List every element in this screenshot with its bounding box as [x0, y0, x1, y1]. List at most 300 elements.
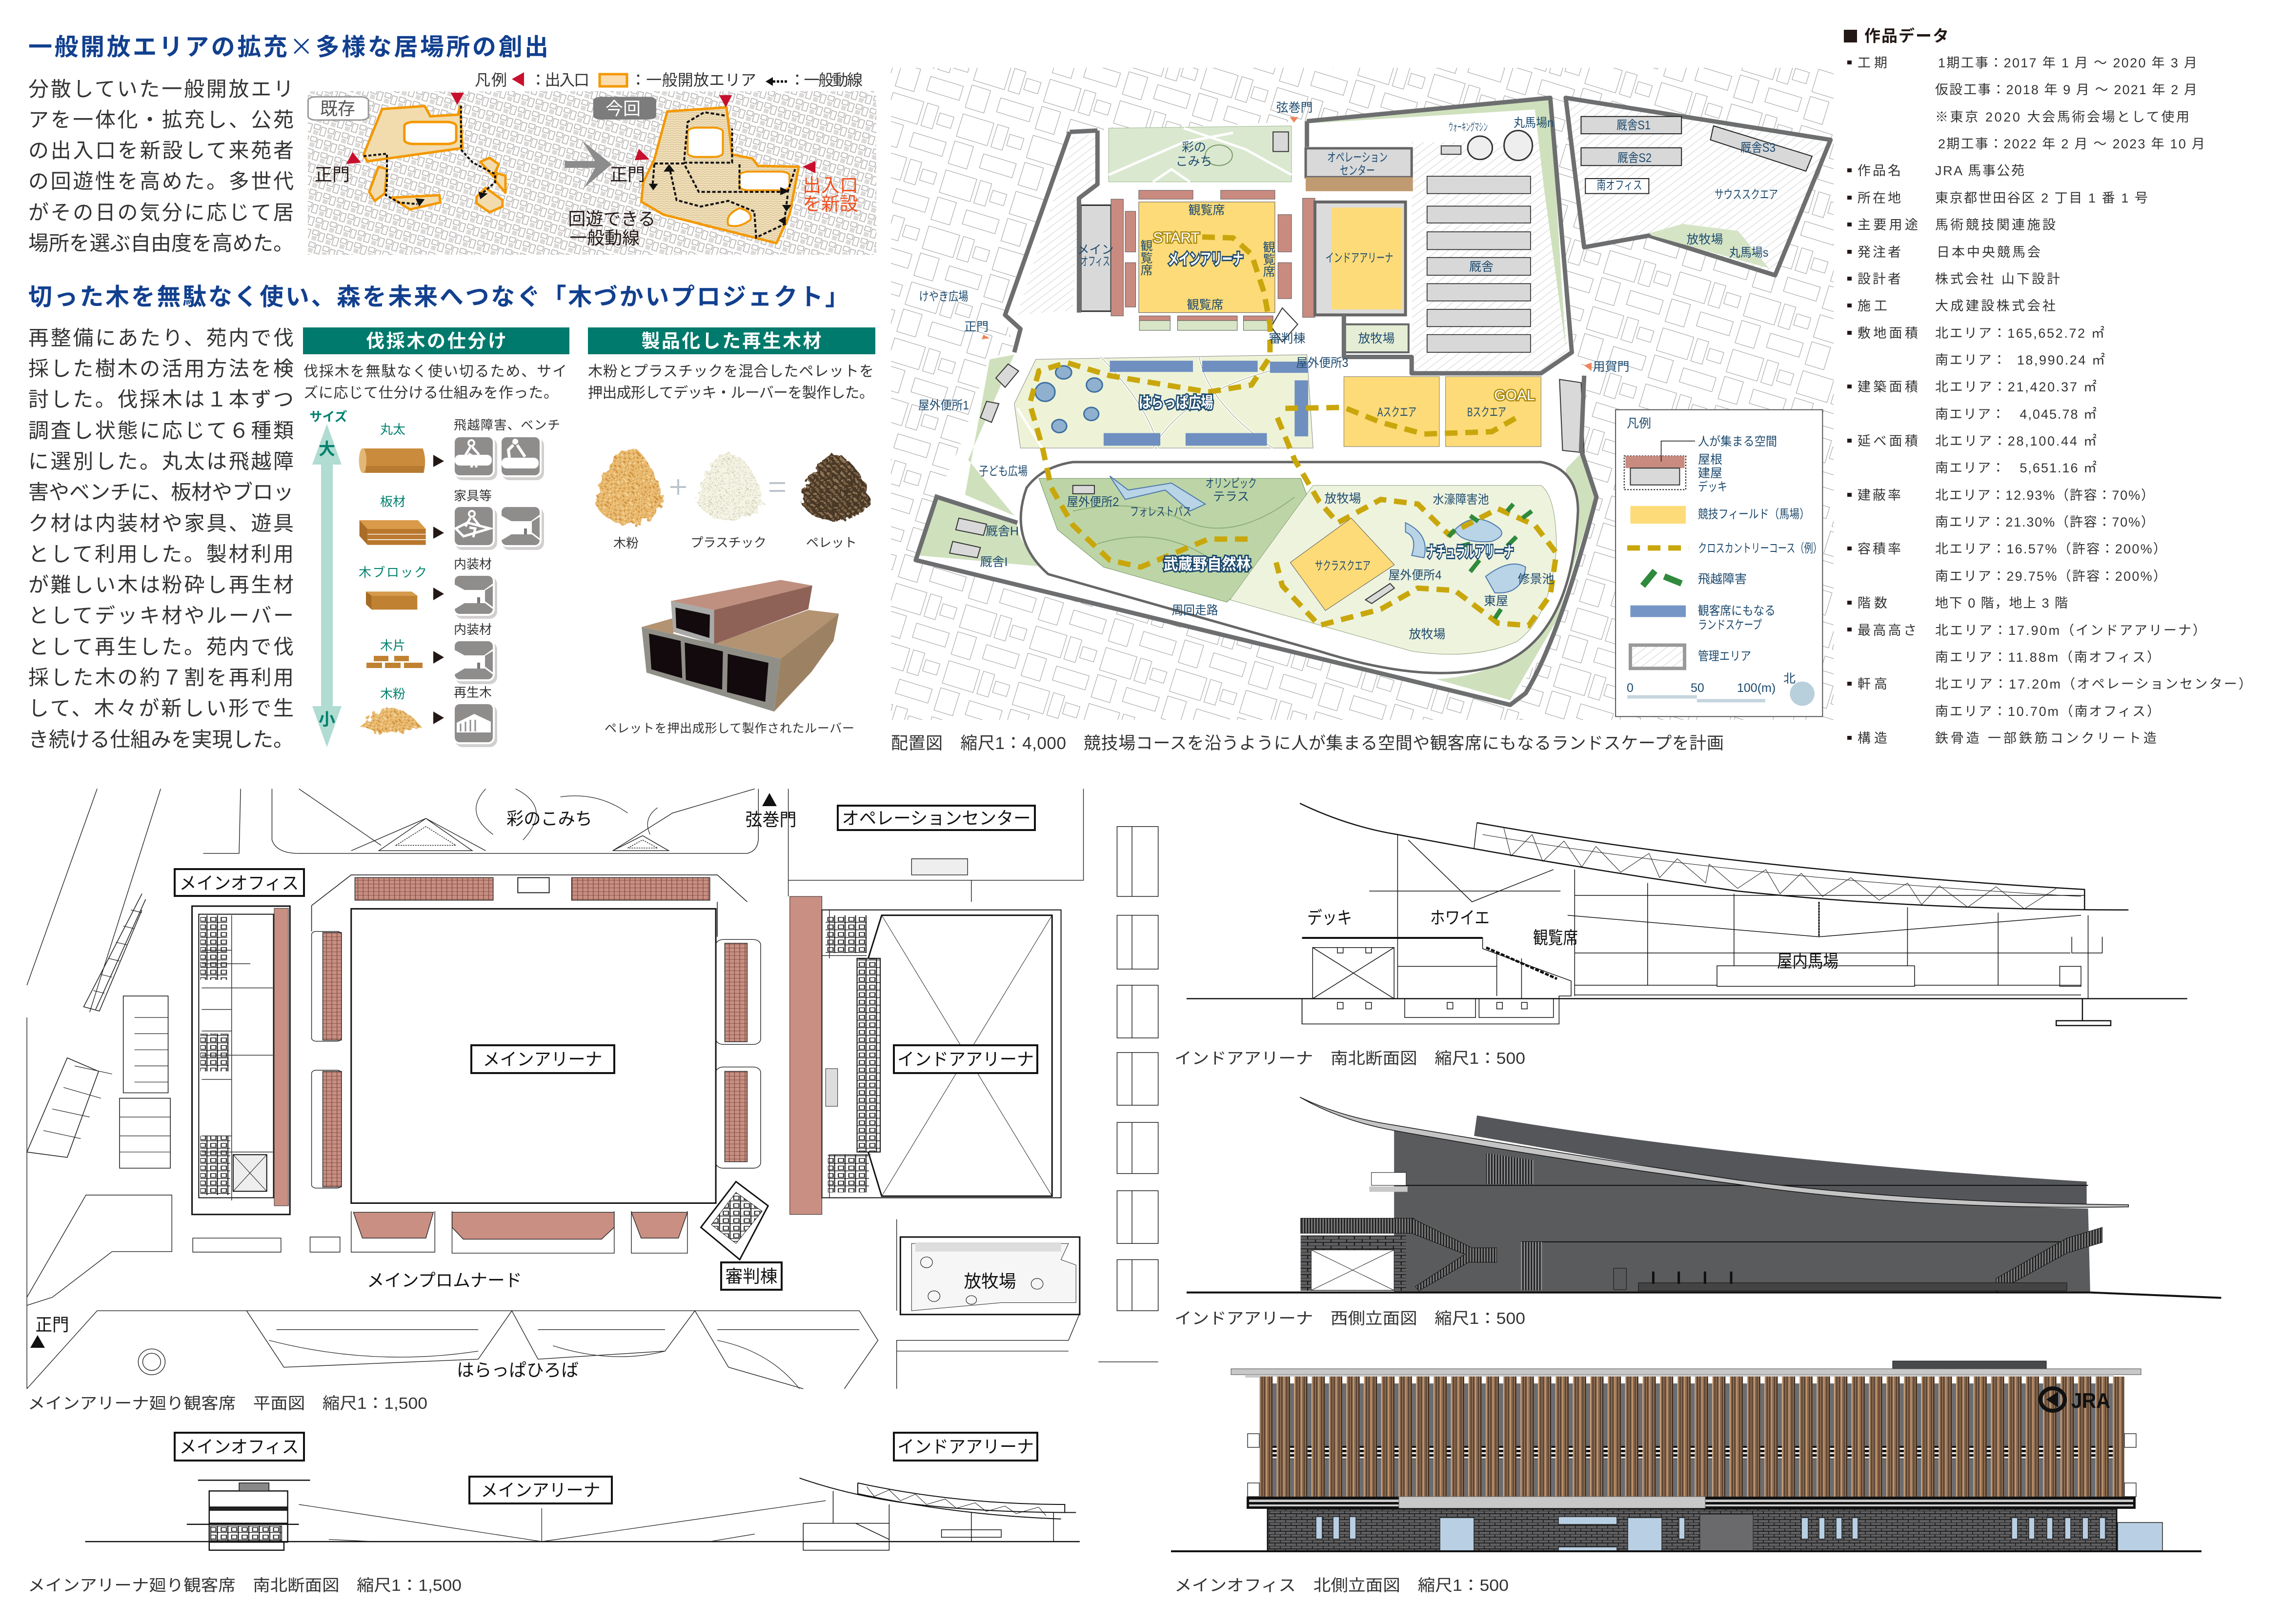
data labels: 延べ面積	[1858, 434, 1918, 448]
data labels: 建蔽率	[1858, 488, 1901, 503]
wood type labels: 丸太	[380, 422, 405, 437]
site plan labels: 武蔵野自然林	[1163, 555, 1251, 573]
plan labels with frames: オペレーションセンター	[842, 808, 1030, 828]
office section	[187, 1480, 310, 1550]
parking stripes	[27, 894, 170, 1168]
data values: 北エリア：16.57%（許容：200%）	[1935, 542, 2166, 556]
legend labels: 建屋	[1698, 467, 1722, 480]
site plan labels: テラス	[1213, 490, 1249, 504]
section heading: open area expansion: 一般開放エリアの拡充×多様な居場所の創出	[28, 28, 548, 62]
site plan labels: 屋外便所1	[918, 399, 969, 412]
water features	[1110, 476, 1526, 593]
existing open area	[364, 106, 505, 212]
site plan labels: Aスクエア	[1377, 406, 1416, 419]
data values: 南エリア： 18,990.24 ㎡	[1935, 353, 2105, 367]
roof edge	[1300, 1097, 2128, 1207]
site plan labels: 観覧席	[1139, 239, 1152, 276]
data labels: 建築面積	[1858, 380, 1918, 394]
operation center	[1306, 148, 1412, 177]
site plan labels: ナチュラルアリーナ	[1427, 543, 1514, 561]
data labels: 設計者	[1858, 272, 1901, 286]
wood type labels: 木ブロック	[359, 565, 427, 580]
indoor section labels	[1307, 908, 1838, 971]
data values: 南エリア：10.70m（南オフィス）	[1935, 704, 2160, 719]
use labels	[454, 418, 560, 700]
data values: 株式会社 山下設計	[1935, 272, 2060, 286]
site plan labels: けやき広場	[919, 290, 968, 304]
data values: 日本中央競馬会	[1937, 245, 2040, 260]
text block: wood project description: として利用した。製材利用	[28, 543, 294, 566]
site plan labels: 弦巻門	[1276, 101, 1313, 115]
map labels: 今回	[606, 99, 641, 119]
panel: felled wood sorting	[303, 327, 569, 747]
site plan labels: 屋外便所4	[1389, 568, 1442, 582]
wood type labels: 板材	[380, 494, 405, 509]
management hatch	[1017, 133, 1569, 373]
data values: 北エリア：21,420.37 ㎡	[1935, 380, 2097, 394]
site plan caption: 配置図 縮尺1：4,000 競技場コースを沿うように人が集まる空間や観客席にもなるランドスケープを計画	[891, 734, 1724, 753]
header: sorting	[303, 327, 569, 354]
site plan labels: 屋外便所2	[1067, 495, 1119, 509]
text block: open area description: がその日の気分に応じて居	[28, 201, 294, 224]
management boundary	[916, 98, 1596, 705]
site plan labels: オフィス	[1081, 255, 1110, 268]
main arena ring	[351, 909, 716, 1203]
plan labels plain: 放牧場	[964, 1271, 1016, 1291]
stables	[1427, 176, 1531, 352]
Sakura square	[1290, 518, 1394, 610]
site plan labels: 周回走路	[1172, 604, 1218, 617]
data labels: 構造	[1858, 731, 1887, 746]
JRA logo	[2040, 1388, 2110, 1413]
site plan labels: オペレーション	[1327, 151, 1388, 164]
data labels: 敷地面積	[1858, 326, 1918, 341]
main arena seating	[1125, 190, 1292, 321]
site plan labels: 厩舎S1	[1616, 119, 1651, 132]
main arena seating plan	[323, 877, 747, 1187]
plan labels with frames: メインオフィス	[180, 873, 299, 893]
deck rail and stairs	[1301, 1218, 1414, 1233]
site plan labels: 厩舎S3	[1740, 141, 1776, 155]
roof slab	[1231, 1369, 2141, 1375]
map backgrounds: surrounding city	[308, 91, 876, 255]
text: sorting description: 伐採木を無駄なく使い切るため、サイ	[303, 364, 567, 380]
wood chips	[366, 656, 423, 668]
site plan labels: GOAL	[1494, 387, 1535, 404]
section labels: インドアアリーナ	[897, 1437, 1034, 1457]
north and south site ground	[916, 98, 1596, 705]
indoor arena	[1303, 198, 1315, 317]
data values: 北エリア：17.90m（インドアアリーナ）	[1935, 623, 2206, 638]
material labels: 木粉	[613, 536, 639, 550]
green perimeter	[916, 99, 1595, 700]
roof truss	[1300, 803, 2128, 910]
site plan labels: 丸馬場n	[1514, 116, 1554, 130]
text block: wood project description: 調査し状態に応じて６種類	[28, 419, 294, 442]
site plan labels: 厩舎S2	[1617, 151, 1652, 165]
site plan labels: 放牧場	[1358, 332, 1395, 345]
text block: wood project description: 害やベンチに、板材やブロッ	[28, 481, 294, 504]
use icon: recycled wood	[453, 702, 497, 747]
data values: JRA 馬事公苑	[1935, 163, 2024, 178]
site plan labels: はらっぱ広場	[1139, 394, 1213, 411]
site plan labels: フォレストパス	[1130, 505, 1191, 519]
site plan labels: メインアリーナ	[1168, 250, 1243, 268]
plastic pile	[697, 454, 763, 520]
data values: 北エリア：17.20m（オペレーションセンター）	[1935, 677, 2252, 691]
seating outlines	[193, 932, 761, 1253]
legend labels: デッキ	[1698, 480, 1727, 494]
indoor section labels: 観覧席	[1533, 928, 1578, 948]
text block: open area description: の出入口を新設して来苑者	[28, 139, 294, 162]
plan labels plain: 彩のこみち	[506, 809, 592, 829]
legend: access maps: ：一般動線	[789, 71, 863, 89]
text block: wood project description: 討した。伐採木は１本ずつ	[28, 388, 294, 411]
main office	[1081, 205, 1111, 311]
plan labels plain: はらっぱひろば	[457, 1360, 579, 1380]
site plan labels: サウススクエア	[1715, 188, 1778, 202]
north circles	[1468, 130, 1533, 161]
plan labels plain: メインプロムナード	[367, 1270, 522, 1290]
site plan labels: 放牧場	[1324, 492, 1361, 506]
data values: 鉄骨造 一部鉄筋コンクリート造	[1935, 731, 2157, 746]
arrows to uses	[433, 455, 444, 724]
data labels: 作品名	[1858, 163, 1901, 178]
legend labels	[1627, 417, 1822, 695]
data values: 南エリア： 4,045.78 ㎡	[1935, 407, 2097, 422]
badges	[308, 97, 368, 120]
wood type labels	[359, 422, 427, 701]
use icon: interior 1	[500, 505, 544, 550]
size arrow: 小	[319, 710, 335, 729]
columns and frame	[1369, 834, 2088, 999]
indoor arena plan	[790, 896, 1061, 1215]
data labels: 発注者	[1858, 245, 1901, 260]
text block: wood project description: としてデッキ材やルーバー	[28, 604, 294, 627]
data values: 東京都世田谷区 2 丁目 1 番 1 号	[1935, 191, 2148, 205]
use labels: 内装材	[454, 622, 492, 637]
section labels	[175, 1433, 1037, 1503]
header: sorting: 伐採木の仕分け	[366, 331, 506, 352]
text block: open area description	[28, 78, 294, 255]
cross-country course	[1030, 237, 1556, 626]
new circulation	[652, 112, 795, 238]
legend labels: 競技フィールド（馬場）	[1698, 508, 1810, 521]
legend: access maps: ：一般開放エリア	[630, 71, 756, 89]
site plan labels: 屋外便所3	[1296, 356, 1349, 370]
plan labels with frames: 審判棟	[725, 1266, 778, 1286]
indoor section labels: ホワイエ	[1430, 908, 1490, 928]
legend labels: 凡例	[1627, 417, 1651, 430]
louver caption: ペレットを押出成形して製作されたルーバー	[605, 722, 854, 735]
legend panel	[1616, 410, 1822, 716]
plaza stands	[1104, 361, 1308, 446]
plan labels with frames	[175, 806, 1037, 1290]
cornice	[1247, 1497, 2136, 1509]
data heading: 作品データ	[1864, 27, 1949, 45]
legend: access maps: ：出入口	[530, 71, 589, 89]
jump obstacles	[1449, 504, 1532, 618]
legend: access maps: 凡例	[475, 71, 507, 89]
indoor section labels: デッキ	[1307, 908, 1352, 928]
main arena section drawing	[85, 1478, 1080, 1550]
use icon: interior 3	[453, 639, 497, 684]
legend labels: ランドスケープ	[1698, 618, 1762, 632]
data labels: 工期	[1858, 56, 1887, 70]
data values: 馬術競技関連施設	[1935, 218, 2056, 232]
use labels: 飛越障害、ベンチ	[454, 418, 560, 432]
data values: 地下 0 階，地上 3 階	[1935, 596, 2068, 610]
size arrow: サイズ	[309, 409, 347, 424]
paddock plan	[900, 1237, 1080, 1315]
site plan labels: 水濠障害池	[1433, 493, 1489, 507]
foundation	[2056, 999, 2111, 1026]
material labels: ペレット	[806, 535, 857, 550]
site plan labels: 審判棟	[1269, 332, 1306, 345]
text block: open area description: 分散していた一般開放エリ	[28, 78, 294, 101]
map labels: 正門	[315, 164, 350, 184]
shutter	[1700, 1514, 1753, 1551]
text: products description: 押出成形してデッキ・ルーバーを製作した。	[588, 385, 874, 401]
site plan labels: こみち	[1175, 155, 1212, 168]
map labels: 出入口	[803, 176, 858, 196]
site plan labels: 南オフィス	[1596, 179, 1642, 192]
plaza ponds	[1035, 366, 1102, 433]
text block: open area description: の回遊性を高めた。多世代	[28, 170, 294, 193]
site plan labels: 東屋	[1484, 594, 1508, 608]
plan labels with frames: インドアアリーナ	[897, 1049, 1034, 1069]
use icon: interior 2	[453, 574, 497, 619]
text block: wood project description	[28, 326, 294, 751]
legend labels: 観客席にもなる	[1698, 604, 1776, 618]
text block: wood project description: に選別した。丸太は飛越障	[28, 450, 294, 473]
Musashino forest	[1039, 478, 1316, 602]
louver product photo	[642, 580, 839, 711]
indoor section labels: 屋内馬場	[1777, 951, 1838, 971]
legend labels: クロスカントリーコース（例）	[1698, 542, 1822, 555]
wood type labels: 木片	[380, 638, 405, 653]
main office plan	[192, 906, 290, 1215]
indoor arena west elevation	[1187, 1097, 2221, 1298]
use labels: 家具等	[454, 488, 492, 503]
map: existing and new access routes	[308, 93, 815, 243]
site plan labels: サクラスクエア	[1315, 559, 1371, 573]
text block: wood project description: 再整備にあたり、苑内で伐	[28, 326, 294, 349]
rooftop box	[1893, 1361, 2046, 1373]
header: products	[588, 327, 875, 354]
data values: 2期工事：2022 年 2 月 ～ 2023 年 10 月	[1938, 137, 2205, 151]
site plan labels: 観覧席	[1187, 298, 1224, 312]
site plan labels: Bスクエア	[1467, 406, 1506, 419]
arena frame	[312, 875, 747, 937]
plan context lines	[27, 789, 1158, 1389]
indoor section caption: インドアアリーナ 南北断面図 縮尺1：500	[1174, 1049, 1525, 1067]
text block: wood project description: として再生した。苑内で伐	[28, 635, 294, 658]
text block: wood project description: き続ける仕組みを実現した。	[28, 728, 294, 751]
use labels: 再生木	[454, 685, 492, 700]
elevation caption: インドアアリーナ 西側立面図 縮尺1：500	[1174, 1309, 1525, 1327]
south area	[1566, 98, 1831, 275]
foyer structure	[1302, 938, 1571, 1024]
text: products description: 木粉とプラスチックを混合したペレットを	[588, 364, 874, 380]
material labels: プラスチック	[690, 535, 767, 550]
A and B squares	[1344, 377, 1541, 447]
data values: 南エリア：29.75%（許容：200%）	[1935, 569, 2166, 584]
size arrow	[309, 409, 347, 747]
map labels: 既存	[320, 99, 355, 119]
data labels: 所在地	[1858, 191, 1901, 205]
site plan labels: 丸馬場s	[1729, 246, 1768, 260]
brick base	[1301, 1236, 1406, 1291]
site plan labels: 子ども広場	[979, 465, 1028, 478]
paddock small	[1344, 325, 1409, 352]
plan labels plain: 弦巻門	[746, 810, 796, 830]
wood type labels: 木粉	[380, 687, 405, 701]
balcony	[1372, 1173, 1406, 1185]
map labels: 正門	[610, 164, 645, 184]
indoor riding box	[1717, 966, 1915, 986]
site plan labels: 観覧席	[1188, 203, 1225, 217]
indoor arena section drawing	[1187, 803, 2187, 1026]
wood powder	[361, 708, 421, 732]
text: sorting description	[303, 364, 567, 401]
use icon: furniture	[453, 505, 497, 550]
site plan labels: 厩舎	[1469, 260, 1494, 274]
panel: project data	[1844, 27, 2252, 746]
data labels	[1858, 56, 1918, 746]
legend labels: 0	[1627, 681, 1634, 695]
data values: 北エリア：28,100.44 ㎡	[1935, 434, 2097, 448]
use icon: log bench	[500, 435, 544, 480]
data values: 大成建設株式会社	[1935, 299, 2056, 313]
site plan labels: センター	[1340, 164, 1375, 178]
louver block	[1486, 1153, 1534, 1184]
use icon: log jump	[453, 435, 497, 480]
gate markers	[982, 117, 1592, 371]
elevation caption: main office: メインオフィス 北側立面図 縮尺1：500	[1174, 1576, 1509, 1594]
data values: 北エリア：165,652.72 ㎡	[1935, 326, 2104, 341]
material labels	[613, 535, 857, 550]
site plan labels: インドアアリーナ	[1325, 251, 1393, 265]
site plan labels: 放牧場	[1686, 233, 1723, 246]
natural arena ground	[1230, 486, 1556, 654]
existing circulation	[364, 106, 495, 204]
site plan surrounding city	[891, 68, 1834, 720]
site plan labels: 修景池	[1517, 572, 1555, 586]
site plan labels: 観覧席	[1261, 241, 1275, 277]
data values: 1期工事：2017 年 1 月 ～ 2020 年 3 月	[1938, 56, 2197, 70]
header: products: 製品化した再生木材	[641, 331, 822, 352]
panel: recycled wood products	[588, 327, 875, 735]
data values: 北エリア：12.93%（許容：70%）	[1935, 488, 2154, 503]
small outbuildings	[949, 132, 1584, 604]
map labels: を新設	[803, 194, 858, 215]
data labels: 階数	[1858, 596, 1887, 610]
data labels: 軒高	[1858, 677, 1887, 691]
plan labels with frames: メインアリーナ	[483, 1049, 602, 1069]
site plan labels: 用賀門	[1593, 360, 1630, 374]
wood material illustrations	[359, 448, 426, 609]
plan labels plain: 正門	[35, 1315, 69, 1335]
map labels: 回遊できる	[568, 209, 656, 229]
indoor section small	[800, 1478, 1076, 1550]
text block: wood project description: 採した木の約７割を再利用	[28, 666, 294, 689]
site plan labels	[918, 101, 1778, 641]
site plan labels: オリンピック	[1205, 477, 1257, 490]
text block: open area description: アを一体化・拡充し、公苑	[28, 108, 294, 131]
legend: access maps	[475, 71, 863, 89]
text block: open area description: 場所を選ぶ自由度を高めた。	[28, 232, 294, 255]
data values: 南エリア： 5,651.16 ㎡	[1935, 461, 2097, 475]
text block: wood project description: が難しい木は粉砕し再生材	[28, 573, 294, 596]
louvers	[1259, 1377, 2124, 1497]
section caption: メインアリーナ廻り観客席 南北断面図 縮尺1：1,500	[28, 1576, 462, 1594]
site plan drawing	[916, 98, 1831, 716]
brick podium	[1268, 1509, 2117, 1551]
site plan labels: 厩舎H	[986, 525, 1019, 538]
plus sign	[670, 479, 686, 495]
size arrow: 大	[319, 440, 335, 459]
section labels: メインオフィス	[180, 1437, 299, 1457]
data values: ※東京 2020 大会馬術会場として使用	[1935, 110, 2189, 124]
map labels: 一般動線	[569, 228, 640, 248]
Harappa plaza	[1014, 355, 1313, 448]
entrance markers	[346, 93, 815, 173]
data labels: 施工	[1858, 299, 1887, 313]
legend labels: 飛越障害	[1698, 572, 1747, 586]
floor plan drawing	[27, 789, 1158, 1389]
pellet pile	[801, 456, 870, 521]
main arena field	[1139, 202, 1275, 313]
wall	[1394, 1125, 2090, 1292]
garden: Irodori path	[1109, 126, 1292, 182]
text: products description	[588, 364, 874, 401]
site plan labels: 放牧場	[1409, 628, 1446, 641]
use labels: 内装材	[454, 557, 492, 571]
track loop	[1021, 462, 1578, 673]
data values: 南エリア：21.30%（許容：70%）	[1935, 515, 2154, 529]
plan caption: メインアリーナ廻り観客席 平面図 縮尺1：1,500	[28, 1394, 427, 1412]
text block: wood project description: ク材は内装材や家具、遊具	[28, 512, 294, 535]
data labels: 最高高さ	[1858, 623, 1917, 638]
windows and doors	[1316, 1517, 2162, 1551]
arrow: existing to new	[565, 141, 612, 188]
plan labels plain	[30, 793, 1016, 1380]
ground line	[1171, 1550, 2201, 1552]
legend labels: 人が集まる空間	[1698, 435, 1777, 448]
site plan labels: ウォーキングマシン	[1449, 121, 1488, 133]
data values: 南エリア：11.88m（南オフィス）	[1935, 650, 2160, 665]
legend labels: 屋根	[1698, 453, 1722, 467]
balconies	[1248, 1434, 2136, 1497]
site plan labels: 正門	[964, 320, 989, 334]
section labels: メインアリーナ	[481, 1480, 600, 1500]
text block: wood project description: 採した樹木の活用方法を検	[28, 357, 294, 380]
text: sorting description: ズに応じて仕分ける仕組みを作った。	[303, 385, 558, 401]
data bullets	[1847, 62, 1852, 738]
data values: 仮設工事：2018 年 9 月 ～ 2021 年 2 月	[1935, 82, 2197, 97]
site plan labels: 彩の	[1182, 141, 1206, 154]
stable plan outlines	[1117, 827, 1158, 1311]
upper roof panels	[1474, 1116, 2087, 1206]
judges building plan	[701, 1181, 768, 1259]
text block: wood project description: して、木々が新しい形で生	[28, 697, 294, 720]
site plan labels: 厩舎I	[980, 555, 1008, 569]
legend labels: 100(m)	[1737, 681, 1776, 695]
legend labels: 50	[1691, 681, 1704, 695]
legend labels: 北	[1783, 672, 1796, 686]
ground line	[1187, 1293, 2221, 1298]
